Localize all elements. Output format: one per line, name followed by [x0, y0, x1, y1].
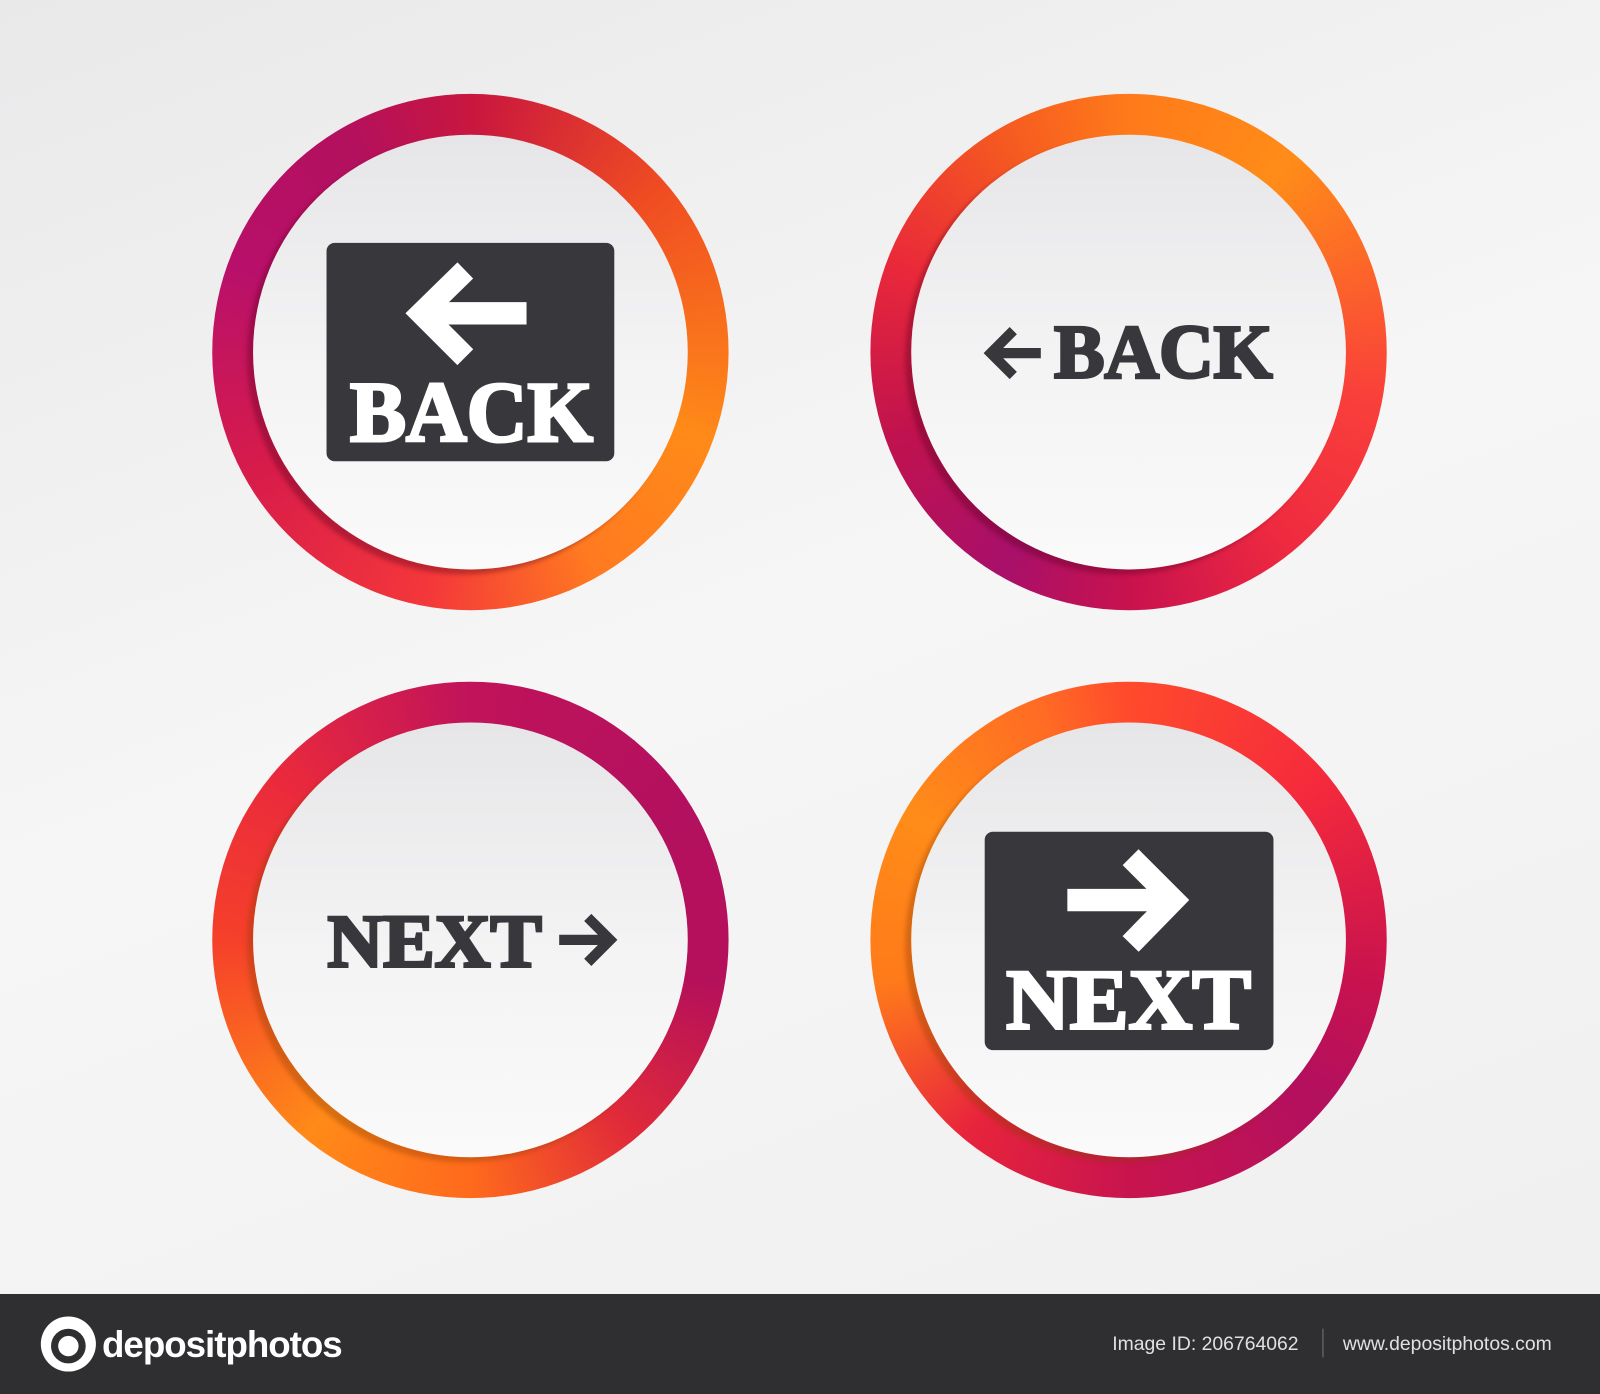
website: www.depositphotos.com: [1342, 1333, 1552, 1355]
ring 1: back box: [212, 94, 729, 610]
logo text: depositphotos: [102, 1324, 342, 1365]
icon: next arrow text: NEXT: [328, 900, 542, 983]
ring 3: next text: [212, 682, 729, 1198]
icon: back box sign: BACK: [350, 365, 593, 460]
image id: Image ID: 206764062: [1112, 1333, 1299, 1355]
ring 2: back text: [870, 94, 1387, 610]
icon: next box sign: [985, 832, 1273, 1050]
icon: next box sign: NEXT: [1006, 953, 1251, 1048]
icon: back arrow text: BACK: [1054, 310, 1272, 395]
ring 4: next box: [870, 682, 1387, 1198]
icon: back box sign: [327, 243, 614, 461]
icon: logo camera: [41, 1316, 96, 1372]
footer bar: [0, 1294, 1600, 1394]
